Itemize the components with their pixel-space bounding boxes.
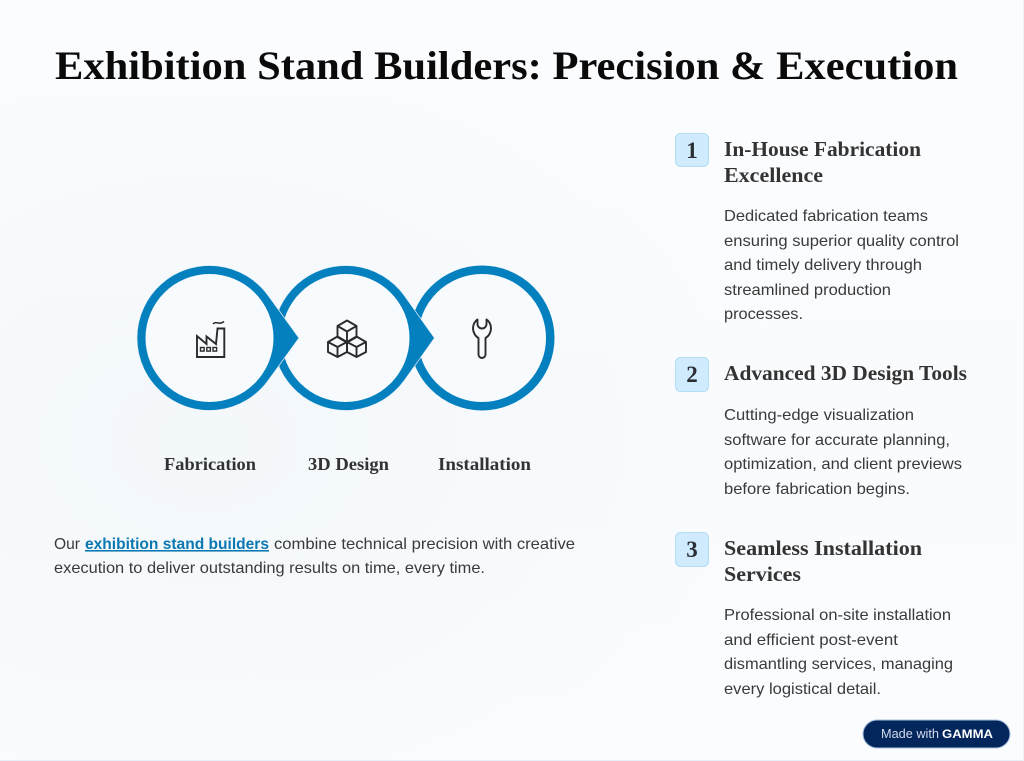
label: Fabrication: Fabrication — [164, 454, 256, 474]
heading 2: Advanced 3D Design Tools — [724, 361, 967, 385]
number badge 3 — [676, 532, 708, 566]
heading 1: In-House Fabrication — [724, 137, 921, 161]
description 3: dismantling services, managing — [724, 656, 953, 673]
description 2: before fabrication begins. — [724, 481, 910, 498]
heading 3 — [724, 536, 922, 586]
intro paragraph: exhibition stand builders — [85, 536, 269, 553]
description 3 — [724, 607, 953, 698]
intro paragraph: combine technical precision with creative — [274, 536, 575, 553]
circle: installation — [414, 270, 550, 406]
heading 1 — [724, 137, 921, 187]
circle with arrow: fabrication — [137, 265, 299, 410]
label: Installation: Installation — [438, 454, 531, 474]
label: 3D Design: 3D Design — [308, 454, 389, 474]
description 1: streamlined production — [724, 282, 891, 299]
item 1: in-house fabrication — [676, 134, 959, 323]
circle with arrow: 3D design — [273, 265, 434, 410]
description 2 — [724, 407, 962, 498]
icon: wrench — [473, 320, 491, 358]
title: Exhibition Stand Builders: Precision & Execution — [55, 43, 958, 88]
number badge 1 — [676, 134, 708, 166]
heading 1: Excellence — [724, 163, 823, 187]
heading 3: Seamless Installation — [724, 536, 922, 560]
description 2: software for accurate planning, — [724, 432, 950, 449]
description 1: processes. — [724, 306, 803, 323]
number badge 2: 2 — [686, 362, 698, 387]
icon: cubes — [328, 320, 366, 357]
description 2: optimization, and client previews — [724, 456, 962, 473]
description 1: and timely delivery through — [724, 257, 922, 274]
description 1: Dedicated fabrication teams — [724, 208, 928, 225]
made with gamma badge: Made with — [881, 727, 939, 741]
intro paragraph — [54, 536, 575, 577]
description 3: Professional on-site installation — [724, 607, 951, 624]
intro paragraph: Our — [54, 536, 80, 553]
process diagram: three linked circles — [137, 265, 550, 410]
number badge 2 — [676, 358, 708, 392]
item 2: advanced 3D design tools — [676, 358, 967, 498]
made with gamma badge — [863, 720, 1010, 748]
description 3: and efficient post-event — [724, 632, 899, 649]
made with gamma badge: GAMMA — [942, 729, 993, 741]
description 1 — [724, 208, 959, 323]
description 1: ensuring superior quality control — [724, 233, 959, 250]
description 2: Cutting-edge visualization — [724, 407, 914, 424]
item 3: seamless installation services — [676, 532, 953, 698]
number badge 3: 3 — [686, 537, 698, 562]
heading 3: Services — [724, 562, 801, 586]
icon: factory — [197, 322, 224, 357]
description 3: every logistical detail. — [724, 681, 881, 698]
intro paragraph: execution to deliver outstanding results on time, every time. — [54, 560, 485, 577]
number badge 1: 1 — [686, 138, 698, 163]
